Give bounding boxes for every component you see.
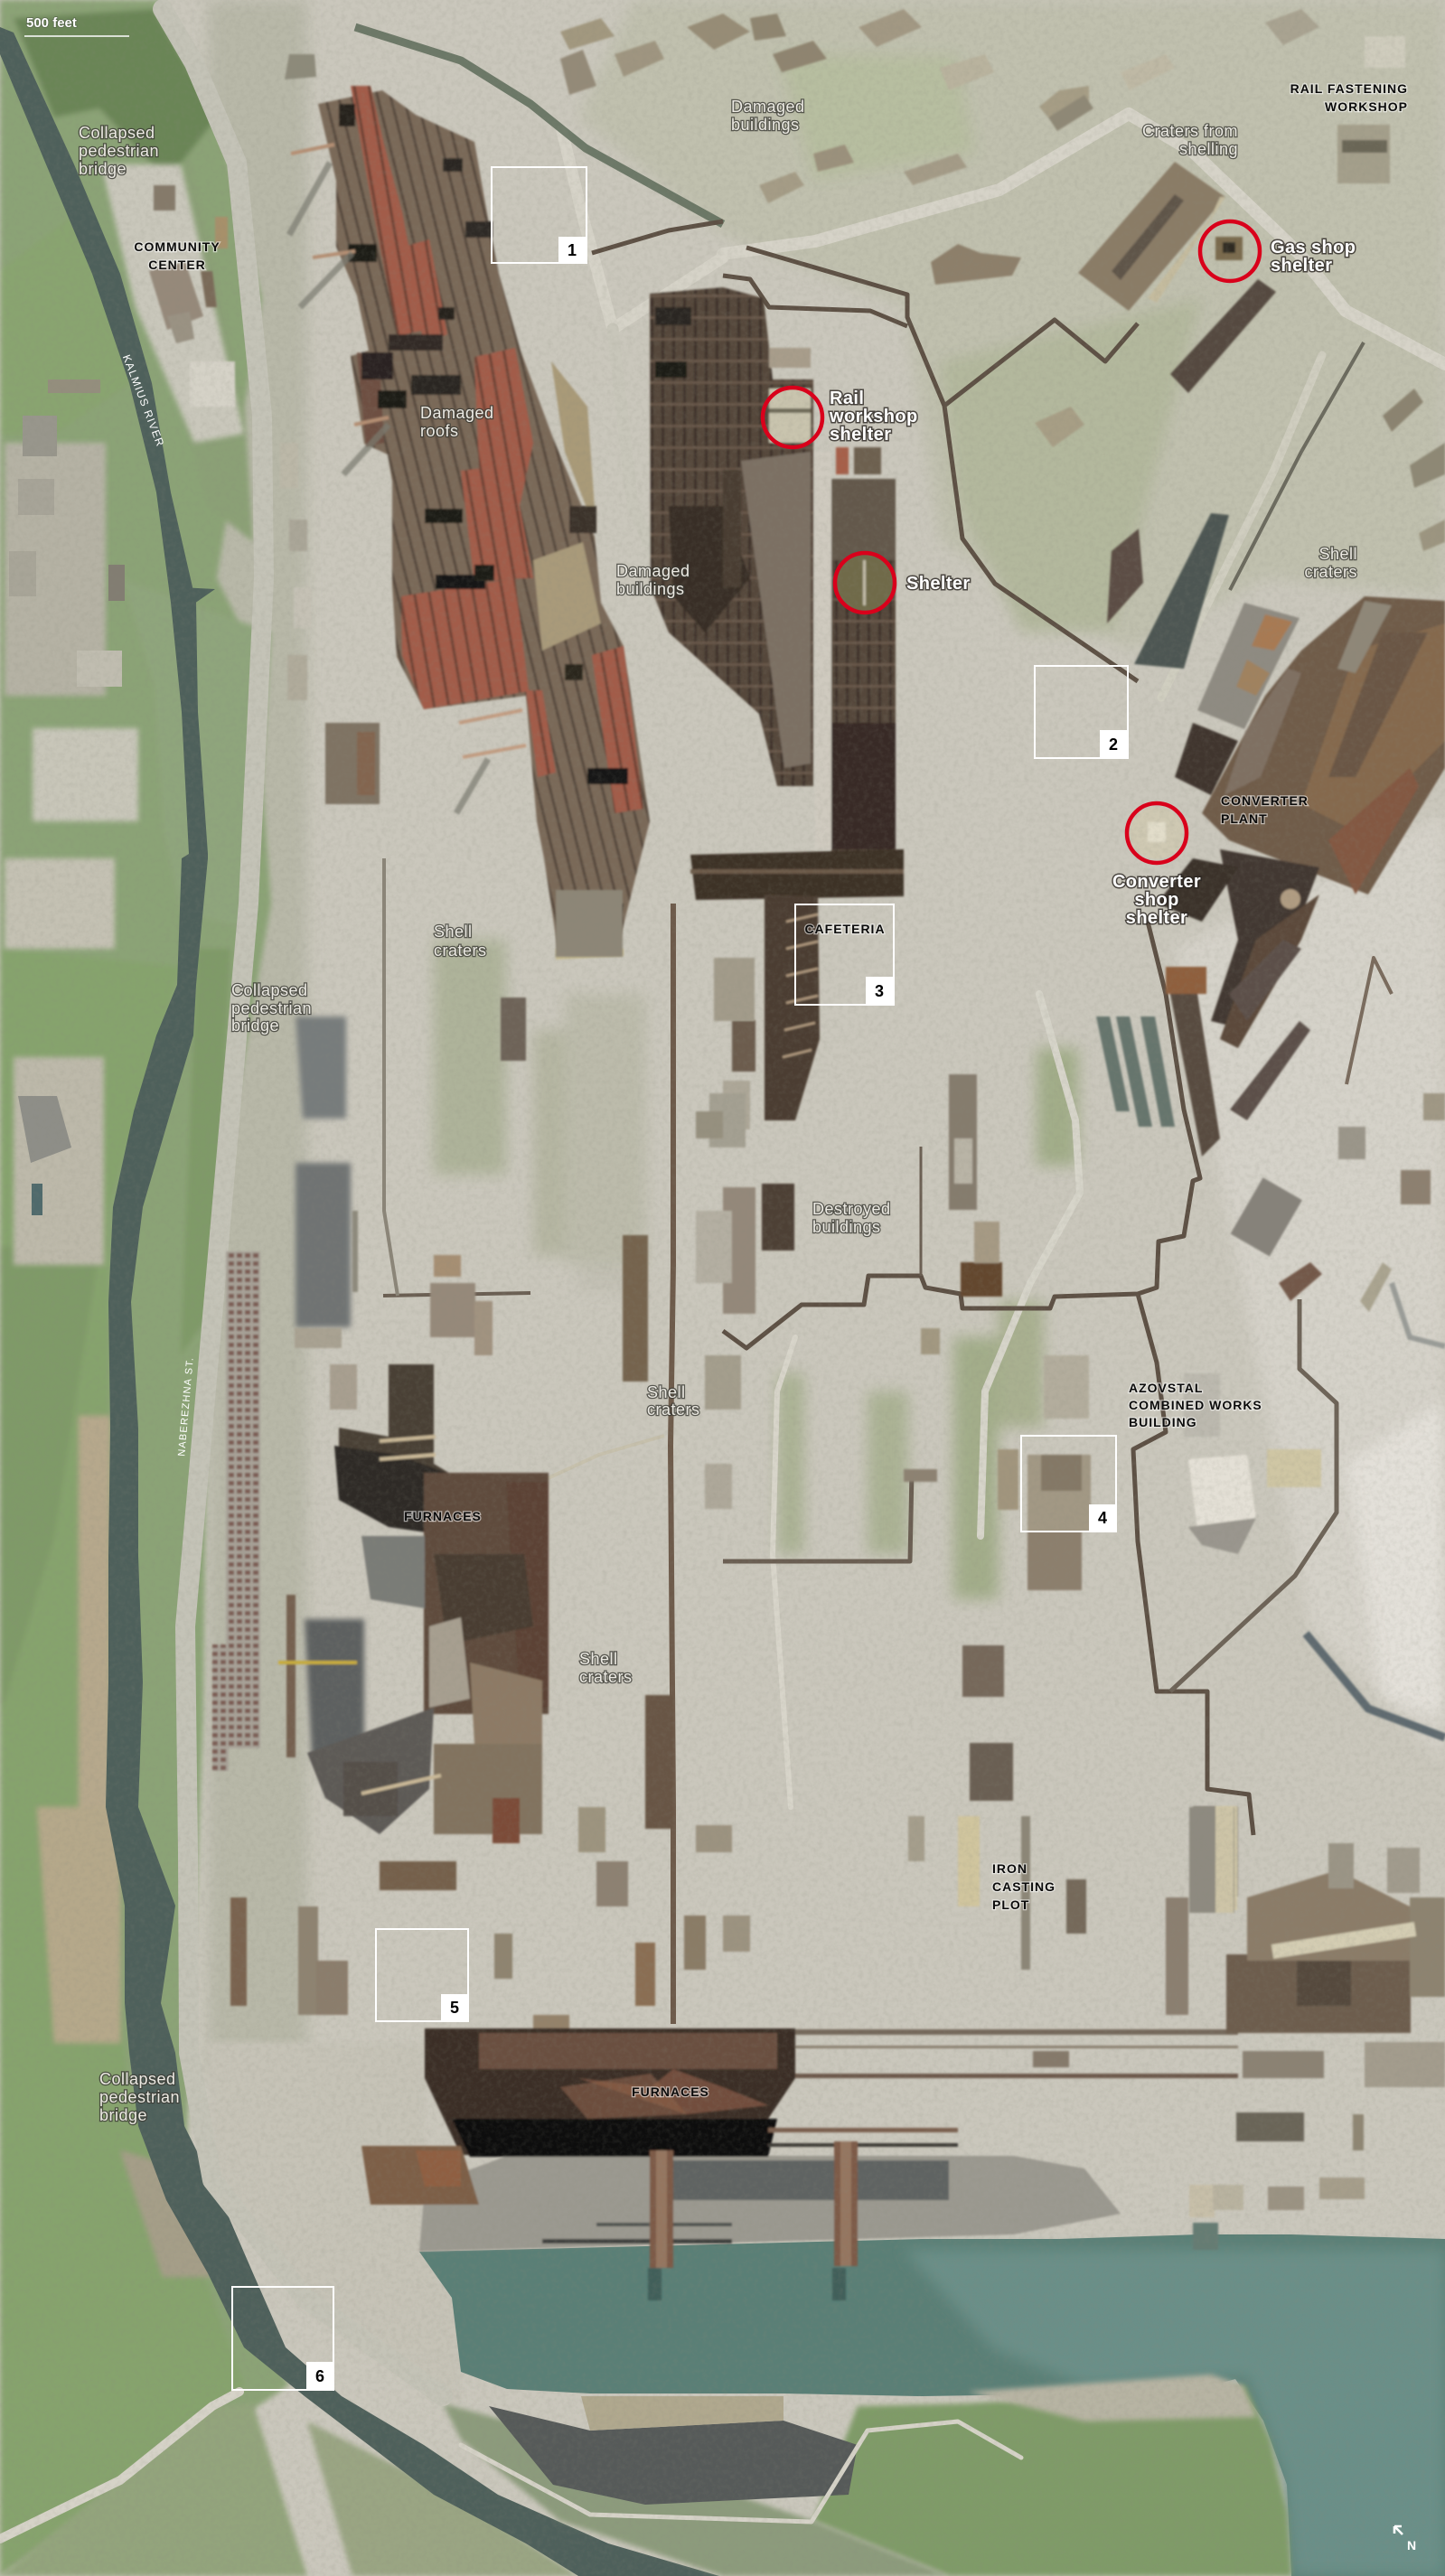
gantries	[650, 2150, 673, 2268]
shelter marker: converter shop: shelter	[1126, 908, 1187, 928]
shelter marker: gas shop: Gas shop	[1271, 238, 1356, 258]
detail box 5	[376, 1929, 468, 2021]
compounds west of river	[0, 164, 578, 2576]
detail box 3: cafeteria	[795, 904, 894, 1005]
rail workshop roof	[769, 348, 811, 368]
long shadows	[289, 163, 330, 235]
label: Azovstal combined works building: BUILDING	[1129, 1415, 1197, 1429]
cooling tanks	[1134, 513, 1229, 669]
central and eastern ruins	[723, 1020, 1445, 1910]
shelter hall	[831, 479, 896, 854]
south bank land	[443, 2375, 1291, 2576]
settling ponds	[1096, 1016, 1130, 1111]
label: rail fastening workshop: WORKSHOP	[1325, 99, 1408, 114]
pale damaged edges	[533, 542, 601, 651]
label: collapsed pedestrian bridge, north: pedestrian	[79, 142, 159, 160]
rail wagons	[226, 1251, 260, 1748]
label: rail fastening workshop: RAIL FASTENING	[1290, 81, 1408, 96]
detail box 6: 6	[315, 2367, 324, 2385]
label: collapsed pedestrian bridge, north: bridge	[79, 160, 127, 178]
coal stockpile	[489, 2406, 858, 2505]
shelter marker: gas shop	[1200, 221, 1356, 281]
central hall with rail workshop	[650, 287, 904, 1120]
pale shelter ruin	[1130, 807, 1184, 859]
shelter marker: central shelter: Shelter	[906, 574, 971, 594]
Kalmius river	[0, 27, 719, 2576]
detail box 1: 1	[568, 241, 577, 259]
grey roof	[1197, 603, 1300, 729]
west rust block	[361, 2146, 479, 2205]
dark machinery	[1175, 723, 1238, 795]
label: collapsed pedestrian bridge, south: Collapsed	[99, 2070, 176, 2088]
label: shell craters, northeast: Shell	[1318, 545, 1357, 563]
roof holes	[348, 244, 377, 262]
shelter marker: rail workshop: workshop	[829, 407, 918, 426]
azovstal combined works	[1188, 1455, 1256, 1530]
detail box 1	[492, 167, 586, 263]
shelter marker: rail workshop: Rail	[830, 389, 864, 408]
label: shell craters, west: Shell	[434, 923, 473, 941]
label: damaged roofs: roofs	[420, 422, 459, 440]
label: damaged roofs: Damaged	[420, 404, 494, 422]
coal trains	[542, 2239, 732, 2243]
label: collapsed pedestrian bridge, north: Collapsed	[79, 124, 155, 142]
label: shell craters, center: Shell	[647, 1383, 686, 1401]
rail band	[1230, 1021, 1310, 1120]
label: shell craters, west: craters	[434, 941, 487, 960]
southeast furnace	[1166, 1807, 1445, 2087]
label: converter plant: CONVERTER	[1221, 793, 1309, 808]
north arrow: N	[1407, 2538, 1416, 2553]
chimney pipes	[291, 145, 334, 154]
label: Naberezhna St: NABEREZHNA ST.	[176, 1356, 196, 1457]
label: community center: CENTER	[148, 258, 206, 272]
label: collapsed pedestrian bridge, south: bridge	[99, 2106, 147, 2124]
label: craters from shelling: Craters from	[1142, 122, 1238, 140]
small NE structures	[1383, 389, 1423, 432]
detail box 3: cafeteria: 3	[875, 982, 884, 1000]
harbor water	[419, 2234, 1445, 2576]
label: damaged buildings, north: Damaged	[731, 98, 805, 116]
blast furnace row at the port	[361, 2028, 1365, 2300]
shelter marker: gas shop: shelter	[1271, 256, 1332, 276]
label: shell craters, northeast: craters	[1304, 563, 1357, 581]
label: Azovstal combined works building: COMBINED WORKS	[1129, 1398, 1262, 1412]
label: shell craters, south: Shell	[579, 1650, 618, 1668]
shelter marker: converter shop	[1112, 803, 1201, 928]
shelter marker: central shelter	[835, 553, 971, 613]
label: craters from shelling: shelling	[1179, 140, 1238, 158]
label: furnaces, south: FURNACES	[632, 2084, 709, 2099]
label: shell craters, south: craters	[579, 1668, 633, 1686]
horizontal pipelines	[795, 2029, 1238, 2035]
detail box 6	[232, 2287, 333, 2390]
label: iron casting plot: CASTING	[992, 1879, 1056, 1894]
northeast gas shop buildings	[560, 9, 1445, 669]
shelter marker: rail workshop	[763, 388, 918, 447]
west rolling mill hall	[289, 86, 650, 960]
detail box 2: 2	[1109, 735, 1118, 754]
label: shell craters, center: craters	[647, 1400, 700, 1419]
east-west dark band	[690, 849, 904, 900]
detail box 5: 5	[450, 1999, 459, 2017]
community center buildings	[149, 54, 380, 804]
label: iron casting plot: PLOT	[992, 1897, 1029, 1912]
detail box 2	[1035, 666, 1128, 758]
red roof sections	[351, 86, 425, 336]
label: furnaces, west: FURNACES	[404, 1509, 482, 1523]
label: collapsed pedestrian bridge, middle: pedestrian	[231, 999, 312, 1017]
label: damaged buildings, west hall: buildings	[616, 580, 685, 598]
scale bar: 500 feet	[24, 15, 129, 36]
vegetation west	[0, 0, 289, 2576]
label: damaged buildings, west hall: Damaged	[616, 562, 690, 580]
shelter marker: rail workshop: shelter	[830, 425, 891, 445]
label: destroyed buildings: buildings	[812, 1218, 881, 1236]
coal stock yards	[296, 1016, 346, 1119]
north arrow	[1394, 2526, 1416, 2553]
shelter marker: converter shop: shop	[1134, 890, 1179, 910]
label: damaged buildings, north: buildings	[731, 116, 800, 134]
south-central buildings	[230, 890, 1086, 2033]
shelter marker: converter shop: Converter	[1112, 872, 1201, 892]
detail box 4: 4	[1098, 1509, 1107, 1527]
label: collapsed pedestrian bridge, middle: Collapsed	[231, 981, 308, 999]
label: Kalmius River: KALMIUS RIVER	[120, 353, 167, 449]
furnaces	[339, 1364, 479, 1527]
west blast furnace complex	[212, 1016, 549, 1843]
label: iron casting plot: IRON	[992, 1861, 1027, 1876]
label: community center: COMMUNITY	[134, 239, 221, 254]
label: collapsed pedestrian bridge, middle: bridge	[231, 1016, 279, 1035]
river inlet	[181, 587, 215, 604]
detail box 3: cafeteria: CAFETERIA	[804, 922, 886, 936]
dock buildings	[1236, 2112, 1304, 2141]
comb	[765, 895, 820, 1120]
label: collapsed pedestrian bridge, south: pedestrian	[99, 2088, 180, 2106]
converter plant	[1096, 596, 1445, 1157]
pipelines	[355, 27, 1392, 2024]
label: Azovstal combined works building: AZOVSTAL	[1129, 1381, 1203, 1395]
water lighter bay	[904, 2250, 1445, 2576]
shadow arc	[1306, 1634, 1445, 1738]
label: destroyed buildings: Destroyed	[812, 1200, 891, 1218]
rail fastening workshop	[1337, 125, 1390, 183]
pier	[581, 2396, 783, 2431]
label: converter plant: PLANT	[1221, 811, 1268, 826]
detail box 4	[1021, 1436, 1116, 1532]
scale bar: 500 feet: 500 feet	[26, 15, 77, 31]
ground tones	[208, 0, 1445, 2078]
